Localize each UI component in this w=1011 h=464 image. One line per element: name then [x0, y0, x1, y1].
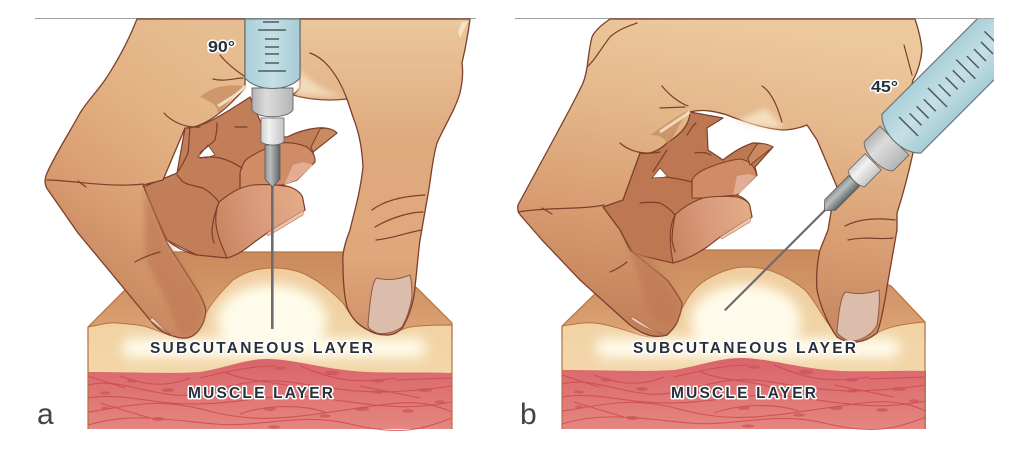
- subcutaneous fat a: [88, 268, 452, 375]
- muscle label a: MUSCLE LAYER: [188, 385, 333, 402]
- syringe a: [245, 19, 300, 329]
- thumbnail a: [368, 275, 412, 334]
- muscle layer a: [88, 325, 452, 431]
- panel letter a: a: [37, 398, 54, 431]
- panel letter b: b: [520, 398, 537, 431]
- middle finger a: [240, 143, 315, 190]
- curled fingers a: [143, 97, 337, 258]
- top rule b: [515, 18, 994, 19]
- middle finger b: [692, 159, 757, 198]
- curled fingers b: [603, 112, 773, 263]
- barrel b: [881, 19, 994, 154]
- muscle layer b: [562, 322, 926, 430]
- white gap b: [652, 168, 668, 178]
- muscle label b: MUSCLE LAYER: [671, 385, 816, 402]
- barrel a: [245, 19, 300, 88]
- needle a: [271, 186, 274, 329]
- lower finger b: [670, 196, 752, 263]
- subcutaneous label b: SUBCUTANEOUS LAYER: [633, 340, 856, 357]
- thumbnail b: [837, 290, 879, 341]
- thumb a: [293, 19, 470, 335]
- lower finger a: [216, 185, 305, 258]
- skin surface a: [88, 252, 452, 340]
- angle label 45: 45°: [871, 79, 898, 96]
- panel a: 90 degree injection: [35, 18, 476, 431]
- top rule a: [35, 18, 476, 19]
- needle b: [724, 209, 826, 311]
- panel b: 45 degree injection: [515, 0, 1011, 431]
- subcutaneous fat b: [562, 267, 925, 372]
- subcutaneous label a: SUBCUTANEOUS LAYER: [150, 340, 373, 357]
- white gap a: [198, 145, 215, 158]
- skin surface b: [562, 250, 925, 340]
- hand back and index finger b: [518, 19, 922, 342]
- syringe b: [724, 19, 994, 311]
- hand back and index finger a: [45, 19, 246, 338]
- angle label 90: 90°: [208, 39, 235, 56]
